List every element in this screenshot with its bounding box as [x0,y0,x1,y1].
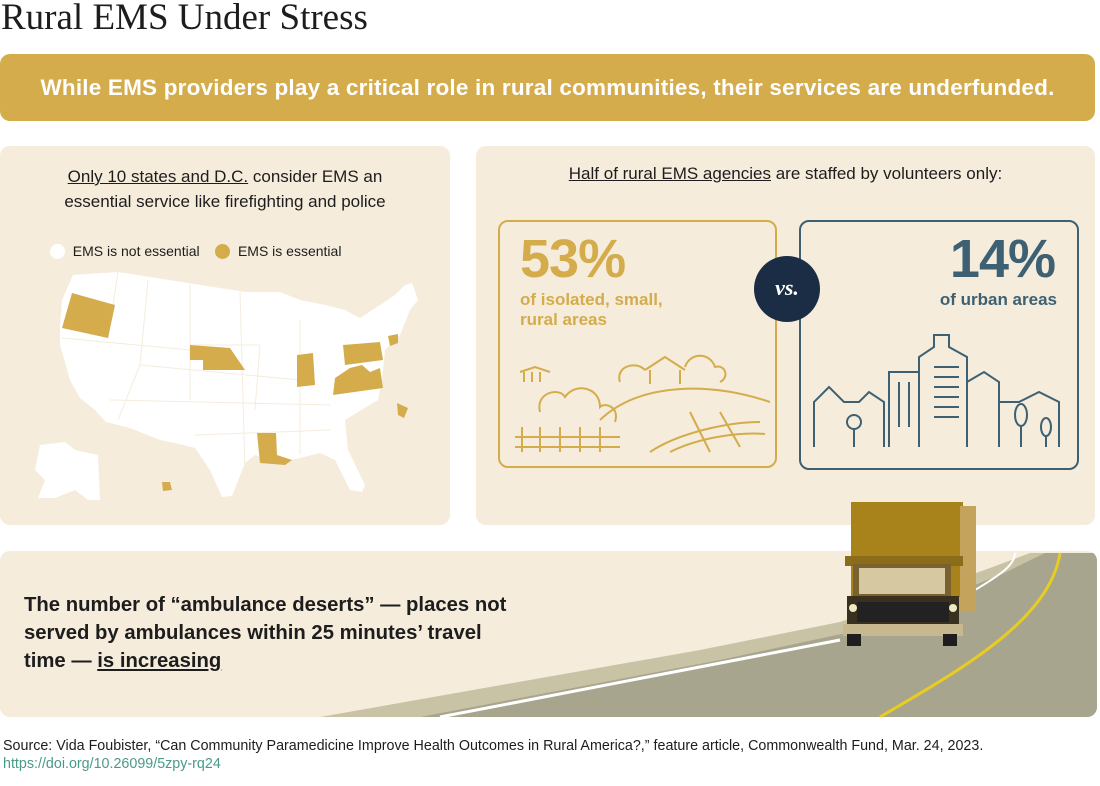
legend: EMS is not essential EMS is essential [73,243,341,259]
source: Source: Vida Foubister, “Can Community Paramedicine Improve Health Outcomes in Rural America?,” feature article, Commonwealth Fund, Mar. 24, 2023. [3,738,983,754]
urban stat box [799,220,1079,470]
icon: ambulance [843,502,976,646]
urban stat box: 14% [950,229,1055,289]
rural stat box: of isolated, small, [520,290,663,309]
vs badge [754,256,820,322]
icon: rural landscape [515,354,770,453]
rural stat box: 53% [520,229,625,289]
deserts text [24,594,506,672]
map heading [64,167,386,211]
map heading: essential service like firefighting and police [64,192,386,211]
source: https://doi.org/10.26099/5zpy-rq24 [3,756,221,772]
deserts text: time — is increasing [24,650,221,672]
banner: While EMS providers play a critical role in rural communities, their services are underfunded. [40,75,1055,100]
banner [0,54,1095,121]
deserts text: served by ambulances within 25 minutes’ travel [24,622,482,644]
volunteers heading: Half of rural EMS agencies are staffed by volunteers only: [569,164,1002,183]
source [3,738,983,772]
vs badge: vs. [775,275,799,300]
panel: volunteers [476,146,1095,525]
urban stat box: of urban areas [940,290,1057,309]
road [320,552,1097,717]
alaska [35,442,100,500]
rural stat box [498,220,777,468]
states essential [62,293,408,491]
panel: ambulance deserts [0,551,1097,717]
rural stat box: rural areas [520,310,607,329]
map heading: Only 10 states and D.C. consider EMS an [68,167,382,186]
deserts text: The number of “ambulance deserts” — places not [24,594,506,616]
icon: city skyline [813,334,1060,447]
map [35,272,418,500]
panel: map [0,146,450,525]
